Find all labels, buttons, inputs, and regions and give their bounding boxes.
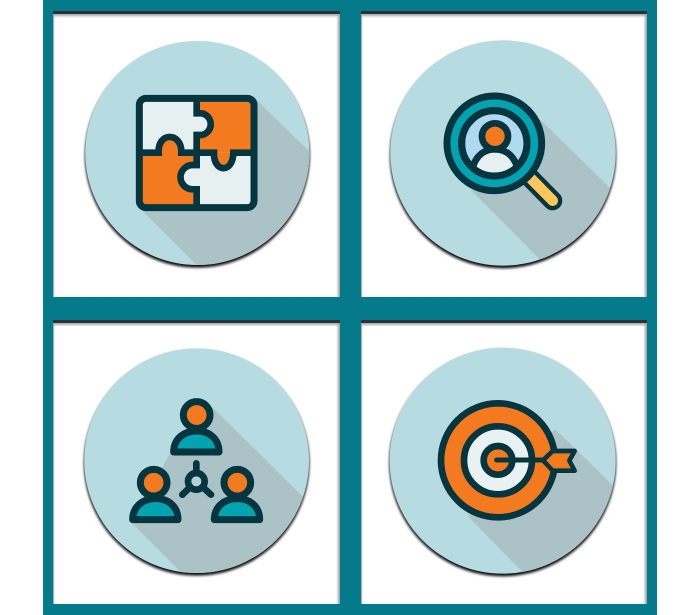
circle background xyxy=(388,40,618,270)
panel: bottom left xyxy=(53,320,340,604)
icon layer xyxy=(82,40,618,578)
icon: target with arrow xyxy=(387,348,618,578)
target rings xyxy=(441,403,555,517)
magnifier handle xyxy=(530,178,553,201)
network hub xyxy=(182,463,211,495)
person top xyxy=(174,402,219,452)
person right xyxy=(214,469,260,520)
icon: magnifier with person xyxy=(388,40,618,270)
circle background xyxy=(387,348,618,578)
arrow xyxy=(497,451,575,471)
magnifier lens xyxy=(447,96,542,191)
panel: bottom right xyxy=(361,320,647,604)
panel: top left xyxy=(53,11,340,297)
puzzle pieces xyxy=(137,97,257,210)
circle background xyxy=(83,41,312,270)
icon: puzzle xyxy=(83,41,312,270)
panel: top right xyxy=(361,11,647,297)
person left xyxy=(133,469,178,520)
icon: team of three xyxy=(82,348,312,578)
circle background xyxy=(82,348,312,578)
